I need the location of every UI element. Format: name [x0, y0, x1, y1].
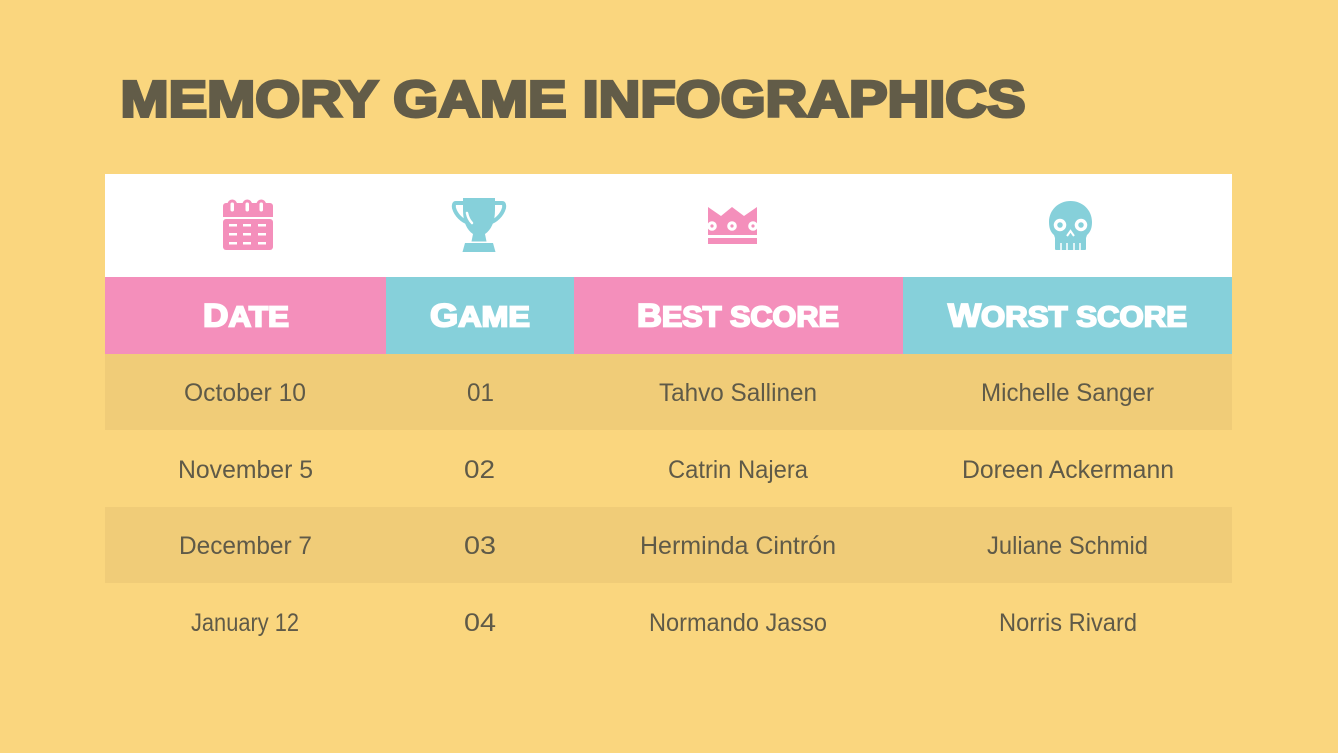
icon: skull [1049, 201, 1092, 250]
row 3 [105, 507, 1232, 583]
row 3: Herminda Cintrón [640, 532, 836, 560]
row 3: December 7 [179, 532, 312, 560]
row 1: 01 [467, 379, 494, 407]
row 3: 03 [464, 532, 496, 560]
title: MEMORY GAME INFOGRAPHICS [120, 70, 1026, 128]
row 4: Norris Rivard [999, 609, 1137, 637]
row 2 [178, 456, 1174, 484]
panel: icon row [105, 174, 1232, 277]
panel: header row [105, 277, 1232, 354]
row 1 [105, 354, 1232, 430]
icon: trophy [454, 198, 504, 252]
heading: best score: BEST SCORE [637, 298, 839, 334]
row 4: Normando Jasso [649, 609, 827, 637]
row 2: November 5 [178, 456, 313, 484]
icon: crown [708, 207, 757, 244]
heading: game: GAME [430, 298, 530, 334]
row 4: January 12 [191, 609, 299, 637]
row 2: 02 [464, 456, 495, 484]
row 4 [191, 609, 1137, 637]
row 1: October 10 [184, 379, 306, 407]
heading: worst score: WORST SCORE [948, 298, 1187, 334]
panel: table [105, 174, 1232, 637]
row 1: Michelle Sanger [981, 379, 1154, 407]
heading: date: DATE [203, 298, 289, 334]
row 2: Catrin Najera [668, 456, 808, 484]
row 2: Doreen Ackermann [962, 456, 1174, 484]
row 4: 04 [464, 609, 496, 637]
row 1: Tahvo Sallinen [659, 379, 817, 407]
row 3: Juliane Schmid [987, 532, 1148, 560]
icon: calendar [223, 201, 273, 250]
